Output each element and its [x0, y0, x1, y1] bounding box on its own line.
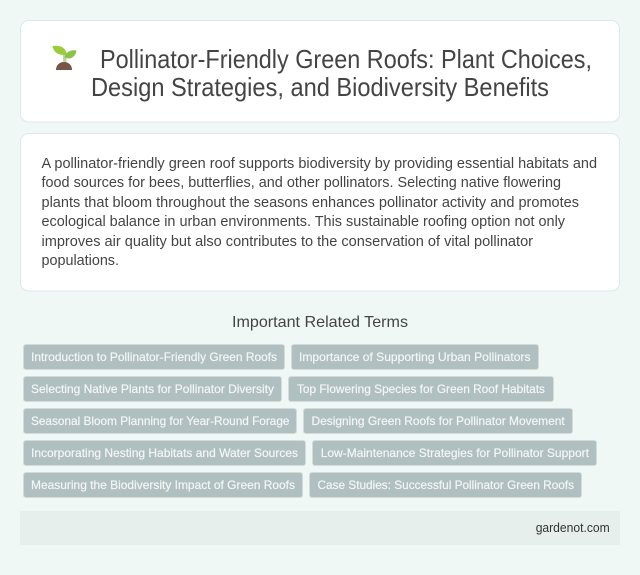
chip: low maintenance — [312, 440, 596, 466]
description text: populations. — [42, 253, 119, 269]
description text: improves air quality but also contributes to the conservation of vital pollinator — [42, 234, 533, 250]
title text: Pollinator-Friendly Green Roofs: Plant Choices, — [100, 46, 592, 74]
chip: native plants — [24, 376, 282, 402]
chip: case studies — [310, 472, 582, 498]
description text: food sources for bees, butterflies, and other pollinators. Selecting native flowering — [42, 175, 561, 191]
chip: seasonal bloom: Seasonal Bloom Planning for Year-Round Forage — [31, 414, 290, 428]
chip: pollinator movement: Designing Green Roofs for Pollinator Movement — [312, 414, 565, 428]
title panel — [20, 20, 620, 122]
footer source text: gardenot.com — [536, 520, 610, 535]
icon: seedling — [52, 46, 76, 70]
chip: pollinator movement — [304, 408, 572, 434]
footer — [20, 511, 620, 545]
description text — [42, 156, 597, 269]
chip: case studies: Case Studies: Successful Pollinator Green Roofs — [318, 478, 574, 492]
description text: A pollinator-friendly green roof supports biodiversity by providing essential habitats and — [42, 156, 597, 172]
chip: flowering species: Top Flowering Species for Green Roof Habitats — [297, 382, 545, 396]
chip: importance: Importance of Supporting Urban Pollinators — [299, 350, 530, 364]
description text: ecological balance in urban environments. This sustainable roofing option not only — [42, 214, 566, 230]
chip: native plants: Selecting Native Plants for Pollinator Diversity — [31, 382, 274, 396]
chip: low maintenance: Low-Maintenance Strategies for Pollinator Support — [321, 446, 590, 460]
chip: importance — [292, 344, 538, 370]
chip: measuring biodiversity — [24, 472, 302, 498]
chip: introduction: Introduction to Pollinator-Friendly Green Roofs — [31, 350, 277, 364]
panel: description — [20, 134, 620, 291]
term chips — [24, 344, 596, 498]
chip: nesting habitats: Incorporating Nesting Habitats and Water Sources — [31, 446, 298, 460]
chip: measuring biodiversity: Measuring the Biodiversity Impact of Green Roofs — [31, 478, 295, 492]
chip: nesting habitats — [24, 440, 306, 466]
title text: Design Strategies, and Biodiversity Benefits — [91, 74, 549, 102]
chip: introduction — [24, 344, 284, 370]
chip: seasonal bloom — [24, 408, 296, 434]
description text: plants that bloom throughout the seasons enhances pollinator activity and promotes — [42, 195, 579, 211]
chip: flowering species — [288, 376, 554, 402]
title text — [91, 46, 592, 102]
heading: important related terms: Important Related Terms — [232, 314, 408, 331]
